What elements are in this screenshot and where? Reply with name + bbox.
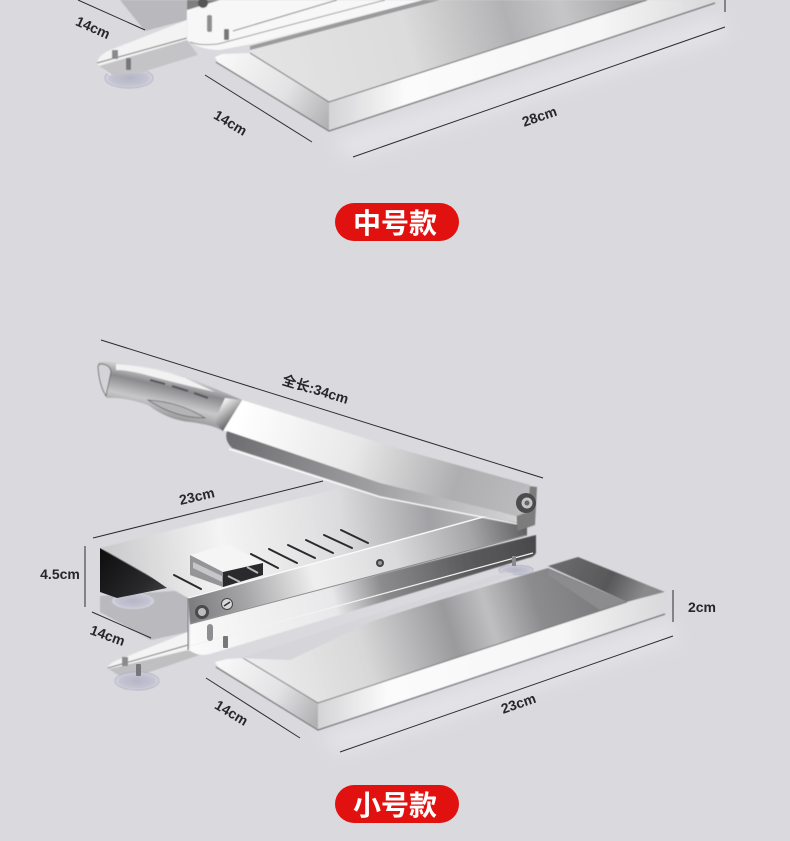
badge: medium size (335, 203, 459, 241)
dimension: 23cm plate (93, 481, 323, 538)
top plate (100, 487, 525, 598)
suction cup, medium (105, 68, 153, 88)
tray rim (318, 592, 665, 729)
food guide box (190, 544, 263, 587)
dimension: 14cm right, medium: 14cm (211, 107, 250, 139)
rail lines (188, 505, 533, 650)
dimension: overall length: 全长:34cm (280, 372, 351, 407)
tray side wall (215, 658, 318, 729)
tray, small (215, 557, 665, 730)
dimension: 14cm back: 14cm (88, 622, 127, 649)
tray back wall (548, 557, 665, 602)
right suction cup (499, 565, 533, 575)
shadow under small machine (100, 590, 188, 640)
dimension: 14cm back (88, 612, 151, 649)
foot plate, medium (97, 20, 198, 75)
shadow under medium machine (120, 0, 187, 31)
blade bevel (226, 431, 517, 523)
dimension: 2cm: 2cm (688, 599, 716, 615)
dimension: 14cm left, medium: 14cm (73, 13, 113, 42)
dimension: 23cm tray: 23cm (499, 690, 538, 717)
dimension: 28cm (353, 0, 725, 157)
left foot plate (108, 632, 200, 677)
slots (174, 530, 368, 589)
dimension: 2cm (673, 590, 716, 622)
blade face (223, 400, 530, 516)
tray, medium (215, 0, 715, 131)
hinge bracket (517, 485, 537, 531)
blade and handle (98, 362, 530, 524)
front rail, medium (187, 0, 440, 50)
dimension: 14cm right, medium (205, 75, 312, 142)
hinge bolt (516, 493, 536, 513)
panel: medium slicer (cropped at top) (73, 0, 725, 157)
badge: small size: 小号款 (353, 790, 437, 821)
rail screw and bolts (195, 556, 516, 648)
dimension: 28cm: 28cm (520, 103, 559, 130)
panel: small slicer (40, 340, 716, 752)
reflection strip under rail (240, 572, 515, 660)
tray floor (243, 568, 627, 703)
dimension: 14cm tray (206, 678, 300, 738)
dimension: 23cm tray (340, 636, 673, 752)
foot pin (136, 664, 141, 676)
badge: medium size: 中号款 (353, 208, 437, 239)
dimension: 14cm left, medium (73, 0, 145, 42)
handle (98, 362, 242, 431)
dimension: 23cm plate: 23cm (178, 484, 216, 508)
badge: small size (335, 785, 459, 823)
lower rail (190, 535, 536, 655)
dimension: 4.5cm: 4.5cm (40, 566, 80, 582)
dimension: 4.5cm (40, 546, 85, 607)
dark underside of plate (100, 548, 167, 598)
back suction cup (112, 593, 154, 609)
dimension: 14cm tray: 14cm (212, 697, 251, 729)
front suction cup (115, 672, 159, 690)
upper rail (188, 505, 527, 624)
dimension: overall length (101, 340, 543, 478)
